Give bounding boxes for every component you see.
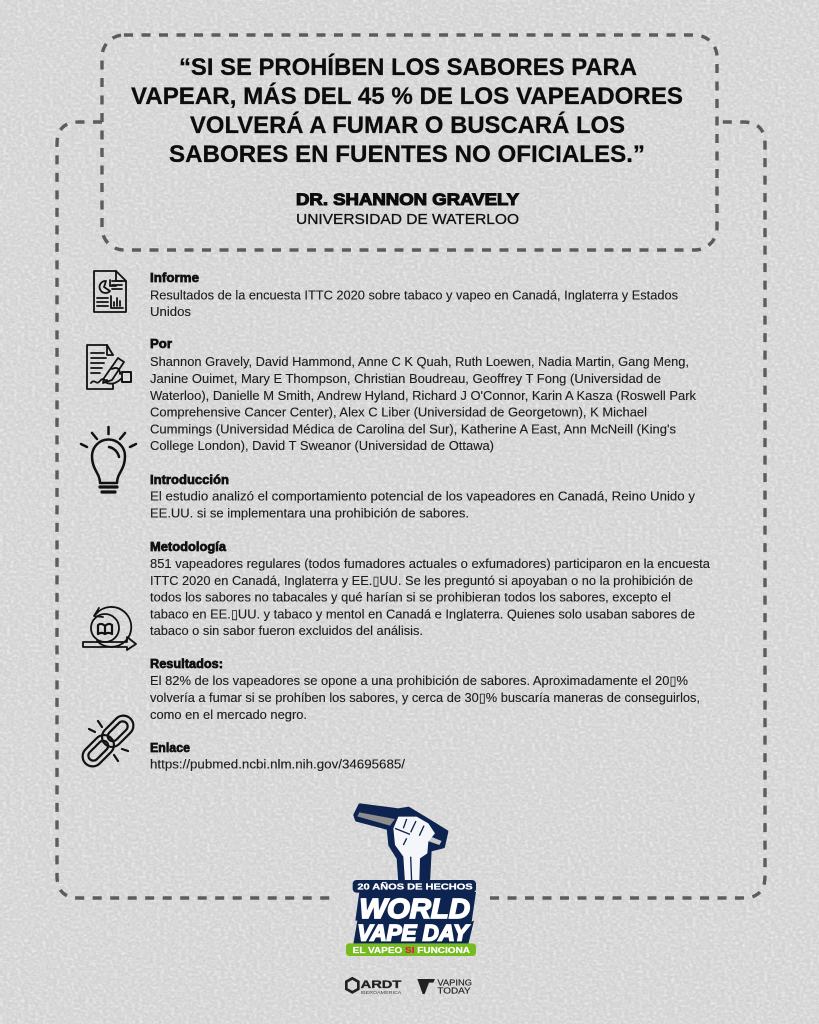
section: informe: Resultados de la encuesta ITTC 2020 sobre tabaco y vapeo en Canadá, Inglaterra y Estados bbox=[150, 288, 678, 302]
section: por: Janine Ouimet, Mary E Thompson, Christian Boudreau, Geoffrey T Fong (Universidad de bbox=[150, 371, 661, 386]
section: informe bbox=[150, 271, 678, 319]
section: enlace: Enlace bbox=[150, 741, 190, 755]
section: por: Waterloo), Danielle M Smith, Andrew Hyland, Richard J O'Connor, Karin A Kasza (Roswell Park bbox=[150, 388, 696, 403]
section: por: Shannon Gravely, David Hammond, Anne C K Quah, Ruth Loewen, Nadia Martin, Gang Meng, bbox=[150, 354, 689, 369]
quote: SABORES EN FUENTES NO OFICIALES.” bbox=[169, 141, 645, 168]
quote author: UNIVERSIDAD DE WATERLOO bbox=[296, 212, 519, 228]
section: metodología bbox=[150, 540, 711, 638]
logo: ARDT Iberoamerica bbox=[346, 978, 402, 995]
section: enlace: https://pubmed.ncbi.nlm.nih.gov/34695685/ bbox=[150, 756, 405, 772]
section: metodología: tabaco en EE.▯UU. y tabaco y mentol en Canadá e Inglaterra. Quienes solo usaban sabores de bbox=[150, 606, 695, 622]
wordmark: World Vape Day: WORLD bbox=[359, 893, 470, 924]
section: introducción: EE.UU. si se implementara una prohibición de sabores. bbox=[150, 506, 469, 520]
section: metodología: tabaco o sin sabor fueron excluidos del análisis. bbox=[150, 623, 423, 638]
quote: VOLVERÁ A FUMAR O BUSCARÁ LOS bbox=[190, 111, 625, 139]
quote author: DR. SHANNON GRAVELY bbox=[296, 190, 520, 209]
logo: ARDT Iberoamerica: ARDT bbox=[361, 979, 402, 991]
section: informe: Unidos bbox=[150, 304, 192, 319]
section: por: College London), David T Sweanor (Universidad de Ottawa) bbox=[150, 438, 494, 453]
section: por: Cummings (Universidad Médica de Carolina del Sur), Katherine A East, Ann McNeill (King's bbox=[150, 422, 676, 436]
quote bbox=[131, 53, 683, 168]
banner: 20 años de hechos bbox=[353, 880, 476, 893]
logo: Vaping Today: VAPING bbox=[437, 978, 472, 987]
quote: “SI SE PROHÍBEN LOS SABORES PARA bbox=[179, 53, 637, 81]
section: por: Comprehensive Cancer Center), Alex C Liber (Universidad de Georgetown), K Michael bbox=[150, 404, 647, 420]
icon: light bulb bbox=[81, 427, 136, 492]
wordmark: World Vape Day: VAPE DAY bbox=[357, 920, 470, 945]
quote: VAPEAR, MÁS DEL 45 % DE LOS VAPEADORES bbox=[131, 82, 683, 110]
fist emblem bbox=[355, 805, 447, 883]
section: informe: Informe bbox=[150, 271, 199, 285]
logo: World Vape Day bbox=[346, 805, 476, 995]
icon: report document bbox=[94, 271, 126, 312]
section: resultados bbox=[150, 657, 700, 722]
logo: Vaping Today: TODAY bbox=[437, 986, 471, 995]
icon: cycle with book and arrow bbox=[83, 607, 136, 650]
section: resultados: El 82% de los vapeadores se opone a una prohibición de sabores. Aproximadamente el 20▯% bbox=[150, 673, 688, 688]
section: resultados: como en el mercado negro. bbox=[150, 707, 307, 722]
section: metodología: Metodología bbox=[150, 540, 227, 554]
section: por: Por bbox=[150, 337, 172, 351]
icon: signing a document bbox=[87, 345, 131, 389]
slogan pill: EL VAPEO SI FUNCIONA bbox=[353, 945, 470, 955]
section: metodología: ITTC 2020 en Canadá, Inglaterra y EE.▯UU. Se les preguntó si apoyaban o no la prohibición de bbox=[150, 573, 693, 588]
wordmark: World Vape Day bbox=[353, 892, 476, 945]
section: resultados: Resultados: bbox=[150, 657, 223, 671]
dashed frame: outer panel bbox=[57, 122, 765, 898]
icon: chain link bbox=[78, 711, 138, 771]
slogan pill bbox=[346, 943, 476, 956]
section: introducción: El estudio analizó el comportamiento potencial de los vapeadores en Canadá, Reino Unido y bbox=[150, 488, 696, 504]
section: metodología: todos los sabores no tabacales y qué harían si se prohibieran todos los sabores, excepto el bbox=[150, 590, 671, 604]
section: enlace bbox=[150, 741, 405, 772]
dashed frame: quote box bbox=[102, 35, 717, 250]
logo: Vaping Today bbox=[417, 978, 472, 995]
section: introducción bbox=[150, 473, 696, 520]
logo: ARDT Iberoamerica: IBEROAMERICA bbox=[361, 990, 402, 995]
quote author bbox=[296, 190, 520, 228]
section: resultados: volvería a fumar si se prohíben los sabores, y cerca de 30▯% buscaría maneras de conseguirlos, bbox=[150, 690, 700, 705]
section: introducción: Introducción bbox=[150, 473, 229, 487]
section: metodología: 851 vapeadores regulares (todos fumadores actuales o exfumadores) participaron en la encuesta bbox=[150, 556, 711, 571]
banner: 20 años de hechos: 20 AÑOS DE HECHOS bbox=[357, 881, 473, 891]
section: por bbox=[150, 337, 696, 453]
